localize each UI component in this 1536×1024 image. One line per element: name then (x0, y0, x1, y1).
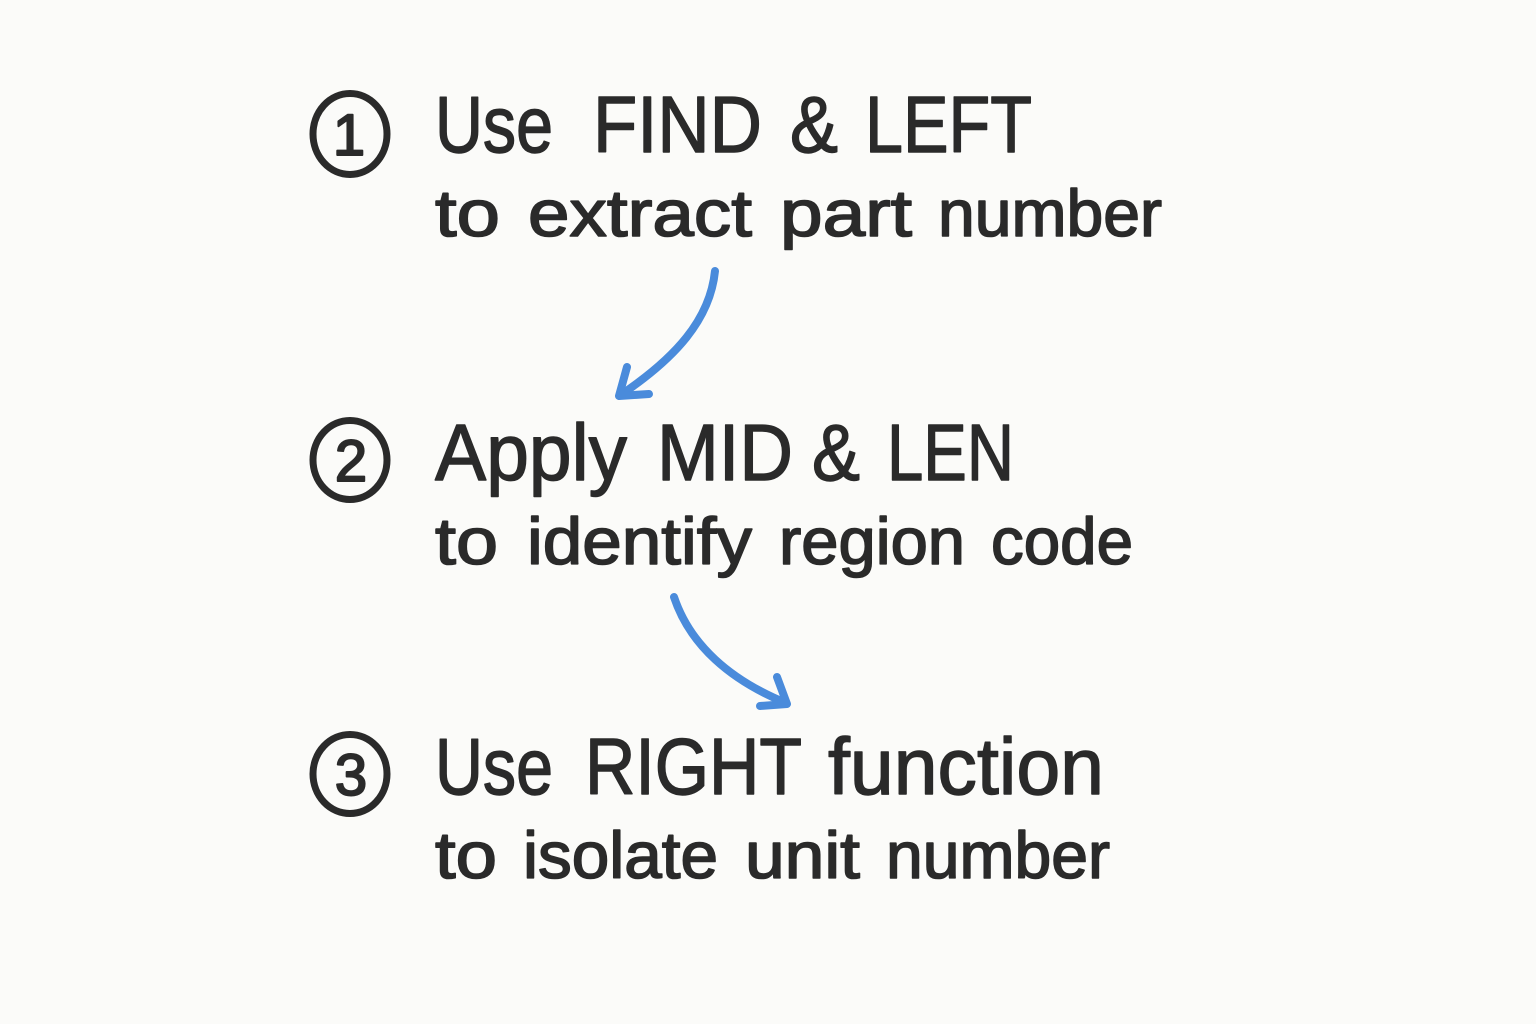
step 1 (313, 80, 1162, 250)
step 1 description: to (435, 176, 500, 250)
arrow: step 2 to step 3 (674, 597, 787, 706)
step 3 description: number (886, 818, 1110, 892)
step 2 description: to (435, 504, 498, 578)
icon: number 2 badge: 2 (335, 429, 367, 494)
step 1 description (435, 176, 1162, 250)
step 3 description: unit (745, 818, 860, 892)
step 1 heading: & (790, 80, 838, 169)
step 2 description: region (779, 504, 965, 578)
step 3 description: isolate (523, 818, 718, 892)
step 2 heading: Apply (435, 408, 627, 497)
arrow: step 1 to step 2 (619, 271, 715, 396)
step 2 description: identify (527, 504, 752, 578)
step 3 description: to (435, 818, 497, 892)
step 1 heading: Use (435, 80, 553, 169)
step 2 heading (435, 408, 1014, 497)
step 2 description: code (991, 504, 1133, 578)
icon: number 2 badge (313, 420, 387, 500)
step 2 description (435, 504, 1133, 578)
step 2 heading: MID (657, 408, 793, 497)
step 3 (313, 722, 1110, 892)
step 2 heading: & (812, 408, 860, 497)
step 2 (313, 408, 1133, 578)
icon: number 3 badge: 3 (335, 743, 367, 808)
step 3 description (435, 818, 1110, 892)
step 1 heading: LEFT (865, 80, 1032, 169)
step 1 description: extract (528, 176, 752, 250)
icon: number 3 badge (313, 734, 387, 814)
step 1 description: part (780, 176, 912, 250)
step 3 heading (435, 722, 1104, 811)
step 1 heading: FIND (593, 80, 762, 169)
step 1 heading (435, 80, 1032, 169)
step 3 heading: function (828, 722, 1104, 811)
icon: number 1 badge: 1 (333, 103, 365, 168)
step 1 description: number (938, 176, 1162, 250)
icon: number 1 badge (313, 94, 387, 174)
step 2 heading: LEN (887, 408, 1014, 497)
step 3 heading: RIGHT (585, 722, 802, 811)
step 3 heading: Use (435, 722, 553, 811)
